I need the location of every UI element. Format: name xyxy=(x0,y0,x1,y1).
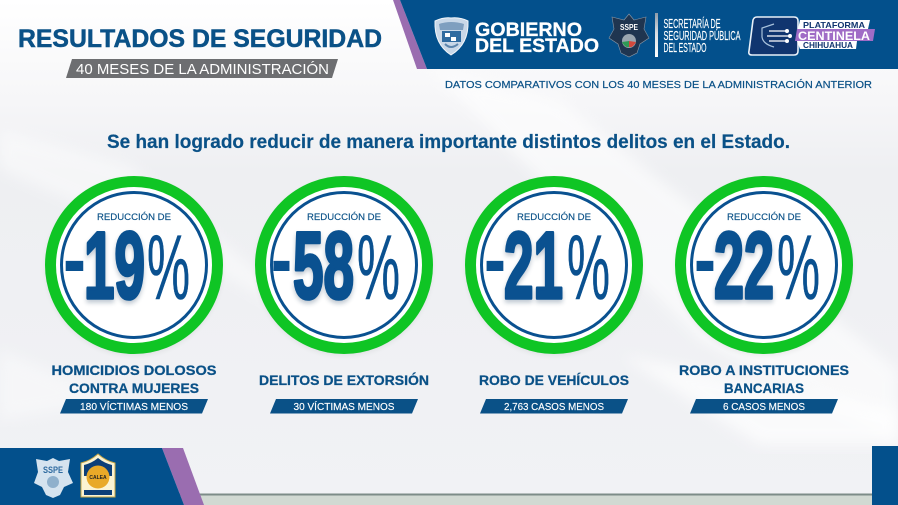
crime label: BANCARIAS xyxy=(724,381,804,396)
ribbon: 30 VÍCTIMAS MENOS xyxy=(294,400,395,413)
label: reducción: REDUCCIÓN DE xyxy=(97,212,171,223)
value: -21%: 21 xyxy=(504,213,563,319)
value: -22%: 22 xyxy=(714,213,774,319)
label: reducción: REDUCCIÓN DE xyxy=(307,212,381,223)
value: -22%: 22 xyxy=(714,216,774,322)
value: -22%: - xyxy=(694,212,716,307)
crime label: HOMICIDIOS DOLOSOS xyxy=(52,363,216,378)
panel: homicidios xyxy=(46,179,222,414)
value: -21%: % xyxy=(567,217,610,319)
ribbon xyxy=(270,399,418,414)
value: -22%: % xyxy=(777,217,820,319)
crime label: CONTRA MUJERES xyxy=(69,381,199,396)
corner block xyxy=(872,446,898,505)
ribbon xyxy=(60,399,208,414)
text: Secretaría: DEL ESTADO xyxy=(664,41,707,55)
value: -19%: 19 xyxy=(84,213,145,319)
ribbon: 6 CASOS MENOS xyxy=(723,402,805,413)
crime label xyxy=(679,363,849,396)
logo: Plataforma Centinela: CHIHUAHUA xyxy=(803,41,853,50)
crime label: DELITOS DE EXTORSIÓN xyxy=(259,373,429,388)
value: -19%: - xyxy=(63,212,86,307)
icon: shield circuit xyxy=(762,24,791,47)
logo: SSPE footer badge xyxy=(34,458,73,498)
logo: CALEA seal xyxy=(81,454,115,497)
ribbon: 2,763 CASOS MENOS xyxy=(504,402,604,413)
divider: SSPE xyxy=(655,13,658,57)
logo: Gobierno del Estado: GOBIERNO xyxy=(475,19,582,41)
panel: extorsión xyxy=(256,179,432,414)
ribbon: 180 VÍCTIMAS MENOS xyxy=(80,400,188,413)
value: -58%: 58 xyxy=(293,216,354,322)
logo: SSPE badge xyxy=(609,14,649,57)
crime label: ROBO DE VEHÍCULOS xyxy=(479,373,629,388)
ring: homicidios xyxy=(46,179,222,355)
value: -58%: 58 xyxy=(293,213,354,319)
value: -21%: 21 xyxy=(504,216,563,322)
logo: CALEA seal: CALEA xyxy=(89,475,107,481)
ring: vehículos xyxy=(466,179,642,355)
panel: instituciones bancarias xyxy=(676,179,852,414)
logo: Plataforma Centinela: CENTINELA xyxy=(798,31,870,43)
header band xyxy=(393,0,898,69)
ring: bancarias xyxy=(676,179,852,355)
logo: Gobierno del Estado: DEL ESTADO xyxy=(475,35,599,57)
logo: SSPE footer badge: SSPE xyxy=(43,465,63,475)
subtitle ribbon: 40 MESES DE LA ADMINISTRACIÓN xyxy=(76,61,329,78)
panel: robo de vehículos xyxy=(466,179,642,414)
text: Secretaría: SEGURIDAD PÚBLICA xyxy=(664,28,741,43)
ribbon xyxy=(480,399,628,414)
comparison note: DATOS COMPARATIVOS CON LOS 40 MESES DE LA ADMINISTRACIÓN ANTERIOR xyxy=(445,78,872,91)
value: -58%: % xyxy=(357,217,400,319)
headline: Se han logrado reducir de manera importante distintos delitos en el Estado. xyxy=(107,131,790,153)
crime label: ROBO A INSTITUCIONES xyxy=(679,363,849,378)
footer band xyxy=(0,448,204,505)
text: Secretaría: SECRETARÍA DE xyxy=(664,16,720,31)
value: -19%: 19 xyxy=(84,216,145,322)
logo: Gobierno del Estado xyxy=(435,18,599,57)
value: -19%: % xyxy=(147,217,190,319)
text: Secretaría xyxy=(664,16,741,55)
value: -58%: - xyxy=(271,212,292,307)
crime label xyxy=(52,363,216,396)
label: reducción: REDUCCIÓN DE xyxy=(517,212,591,223)
value: -21%: - xyxy=(484,212,506,307)
logo: Plataforma Centinela: PLATAFORMA xyxy=(803,20,865,30)
ring: extorsión xyxy=(256,179,432,355)
ribbon xyxy=(690,399,838,414)
title: RESULTADOS DE SEGURIDAD xyxy=(18,25,382,53)
logo: Plataforma Centinela xyxy=(749,17,875,55)
label: reducción: REDUCCIÓN DE xyxy=(727,212,801,223)
icon: state shield xyxy=(435,18,468,55)
logo: SSPE badge: SSPE xyxy=(620,23,639,32)
footer stripe xyxy=(0,494,898,505)
